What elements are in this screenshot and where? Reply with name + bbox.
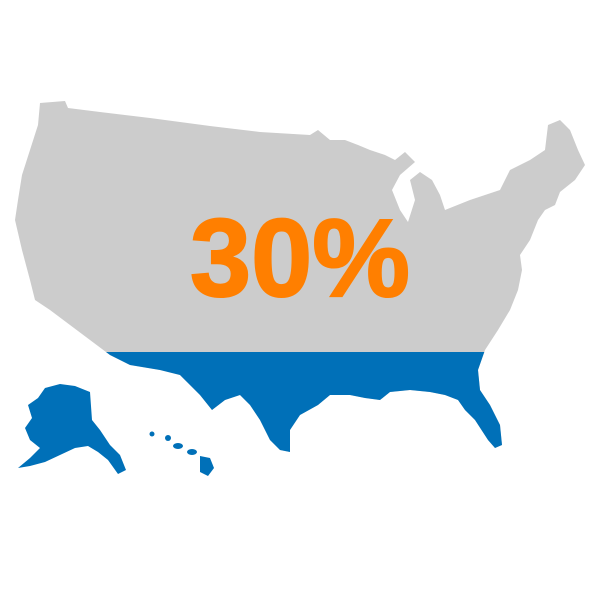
Hawaii (blue) (150, 432, 214, 476)
map infographic (15, 101, 585, 476)
Alaska (blue) (18, 384, 126, 474)
southern region highlighted (blue) (106, 352, 502, 452)
contiguous US (gray) (15, 101, 585, 452)
percentage label: 30% (190, 197, 410, 320)
